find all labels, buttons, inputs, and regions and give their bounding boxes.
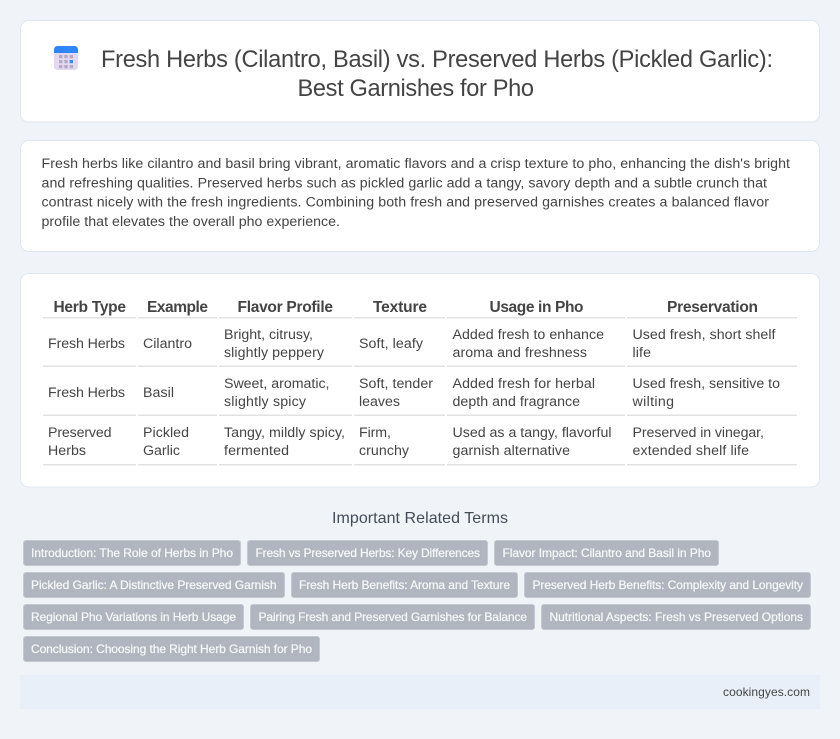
- table row: basil: Added fresh for herbal: [452, 376, 595, 392]
- table header: Example: [147, 299, 208, 316]
- table row: basil: Used fresh, sensitive to: [632, 376, 780, 392]
- table row: pickled garlic: Preserved in vinegar,: [632, 425, 764, 441]
- table row: basil: depth and fragrance: [452, 394, 580, 410]
- table row: pickled garlic: [48, 425, 764, 459]
- chip row 1: Flavor Impact: Cilantro and Basil in Pho: [502, 546, 711, 560]
- table row: pickled garlic: Herbs: [48, 443, 86, 459]
- table row: basil: Soft, tender: [359, 376, 433, 392]
- text block: introduction paragraph: [42, 156, 790, 230]
- panel: title card: [20, 20, 820, 122]
- chip row 1: Fresh vs Preserved Herbs: Key Differences: [256, 546, 480, 560]
- table row: pickled garlic: Preserved: [48, 425, 112, 441]
- table header: [54, 299, 758, 316]
- text block: introduction paragraph: contrast nicely with the fresh ingredients. Combining both fresh and preserved garnishes creates a balanced flavor: [42, 194, 769, 210]
- footer: cookingyes.com: [723, 685, 810, 699]
- table row: basil: [48, 376, 780, 410]
- table row: cilantro: Added fresh to enhance: [452, 327, 604, 343]
- table row: pickled garlic: garnish alternative: [452, 443, 570, 459]
- chip row 3: Nutritional Aspects: Fresh vs Preserved Options: [550, 610, 803, 624]
- table row: basil: slightly spicy: [224, 394, 307, 410]
- table row: cilantro: slightly peppery: [224, 345, 325, 361]
- table row: cilantro: Fresh Herbs: [48, 336, 125, 352]
- chip row 3: Pairing Fresh and Preserved Garnishes for Balance: [258, 610, 527, 624]
- title: Best Garnishes for Pho: [298, 76, 534, 102]
- table row: basil: wilting: [632, 394, 674, 410]
- chip row 4: [24, 636, 320, 662]
- table row: cilantro: [48, 327, 776, 361]
- table row: pickled garlic: crunchy: [359, 443, 410, 459]
- chip row 2: [24, 572, 810, 598]
- table header: Herb Type: [54, 299, 126, 316]
- table row: cilantro: Cilantro: [143, 336, 192, 352]
- heading: important related terms: Important Related Terms: [332, 510, 508, 527]
- text block: introduction paragraph: and refreshing qualities. Preserved herbs such as pickled garlic add a tangy, savory depth and a subtle crunch that: [42, 176, 767, 192]
- icon: calendar: [54, 46, 78, 70]
- table row: pickled garlic: Firm,: [359, 425, 391, 441]
- table row: cilantro: Soft, leafy: [359, 336, 424, 352]
- table row: basil: Fresh Herbs: [48, 385, 125, 401]
- table row: pickled garlic: Used as a tangy, flavorful: [452, 425, 612, 441]
- chip row 2: Fresh Herb Benefits: Aroma and Texture: [299, 578, 510, 592]
- chip row 4: Conclusion: Choosing the Right Herb Garnish for Pho: [31, 642, 312, 656]
- chip row 3: [24, 604, 810, 630]
- table header: Texture: [373, 299, 427, 316]
- table header: Preservation: [667, 299, 758, 316]
- table row: pickled garlic: fermented: [224, 443, 289, 459]
- table row: cilantro: aroma and freshness: [452, 345, 587, 361]
- table row: cilantro: Used fresh, short shelf: [632, 327, 776, 343]
- panel: related term chips: [24, 540, 810, 662]
- table row: pickled garlic: Garlic: [143, 443, 180, 459]
- panel: comparison table: [20, 274, 820, 487]
- table row: cilantro: Bright, citrusy,: [224, 327, 313, 343]
- table row: basil: leaves: [359, 394, 400, 410]
- table row: basil: Sweet, aromatic,: [224, 376, 330, 392]
- chip row 3: Regional Pho Variations in Herb Usage: [31, 610, 236, 624]
- table header: Flavor Profile: [238, 299, 333, 316]
- table row: pickled garlic: extended shelf life: [632, 443, 749, 459]
- chip row 1: [24, 540, 718, 566]
- table row: pickled garlic: Pickled: [143, 425, 189, 441]
- chip row 1: Introduction: The Role of Herbs in Pho: [31, 546, 233, 560]
- title: Fresh Herbs (Cilantro, Basil) vs. Preserved Herbs (Pickled Garlic):: [101, 47, 773, 73]
- panel: introduction: [20, 140, 820, 252]
- text block: introduction paragraph: profile that elevates the overall pho experience.: [42, 214, 340, 230]
- table row: cilantro: life: [632, 345, 651, 361]
- table row: pickled garlic: Tangy, mildly spicy,: [224, 425, 345, 441]
- table row: basil: Basil: [143, 385, 174, 401]
- chip row 2: Preserved Herb Benefits: Complexity and Longevity: [532, 578, 803, 592]
- chip row 2: Pickled Garlic: A Distinctive Preserved Garnish: [31, 578, 276, 592]
- footer: [20, 675, 820, 709]
- table header: Usage in Pho: [490, 299, 584, 316]
- title: [101, 47, 773, 102]
- text block: introduction paragraph: Fresh herbs like cilantro and basil bring vibrant, aromatic flavors and a crisp texture to pho, enhancing the dish's bright: [42, 156, 790, 172]
